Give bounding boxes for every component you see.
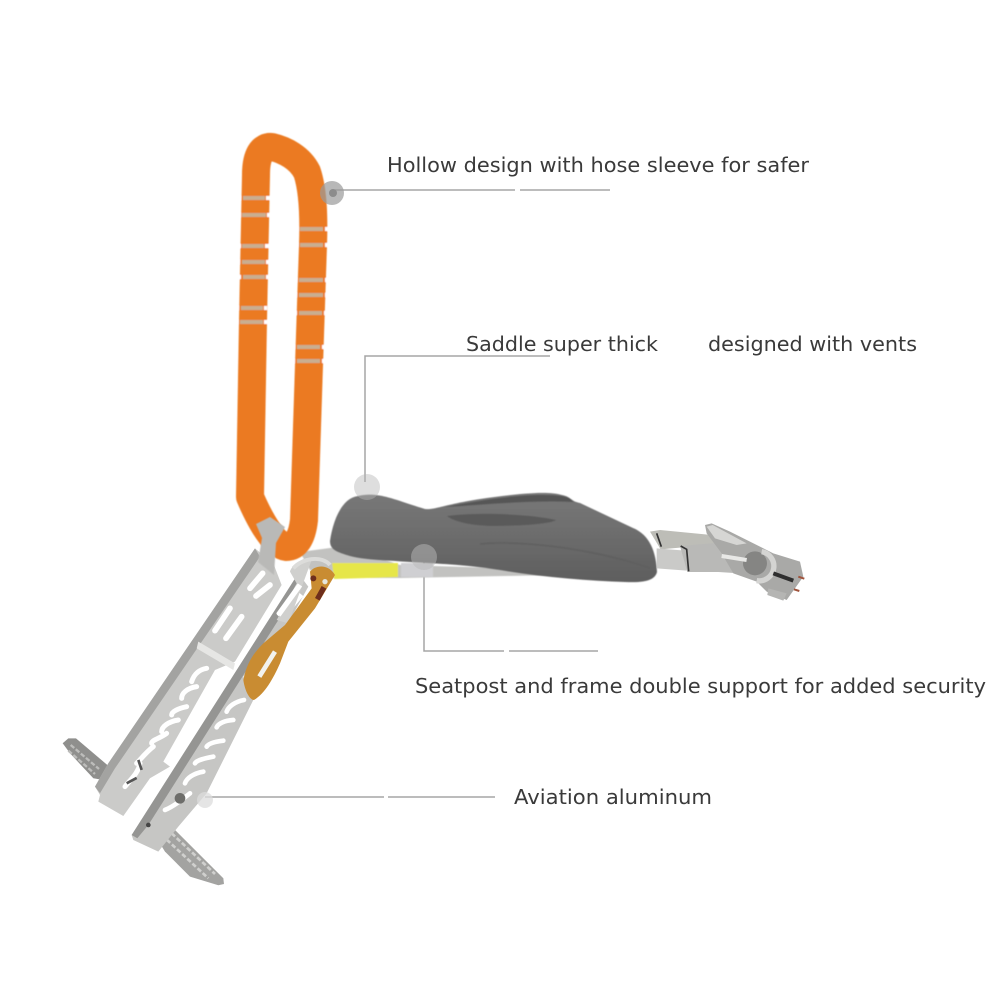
foot pedal: left [63, 738, 107, 780]
ring notches [235, 198, 328, 361]
label: seatpost: Seatpost and frame double support for added security [415, 674, 986, 698]
orange handle [235, 147, 328, 547]
seat clamp [650, 523, 804, 601]
orange latch [243, 559, 335, 700]
bracket: right arm [132, 573, 308, 852]
marker dots [320, 181, 437, 570]
saddle [330, 493, 657, 582]
handle mount [256, 517, 285, 575]
rings on left tube [240, 198, 323, 361]
rings on right tube [297, 229, 323, 361]
connector lines [205, 190, 610, 797]
seat rail and label [300, 546, 560, 579]
label: handle: Hollow design with hose sleeve for safer [387, 153, 810, 177]
foot pedal: right [152, 828, 224, 885]
label: aluminum: Aviation aluminum [514, 785, 712, 809]
bracket: left arm [95, 548, 282, 816]
label: saddle: designed with vents [708, 332, 917, 356]
label: saddle [466, 332, 917, 356]
label: saddle: Saddle super thick [466, 332, 658, 356]
